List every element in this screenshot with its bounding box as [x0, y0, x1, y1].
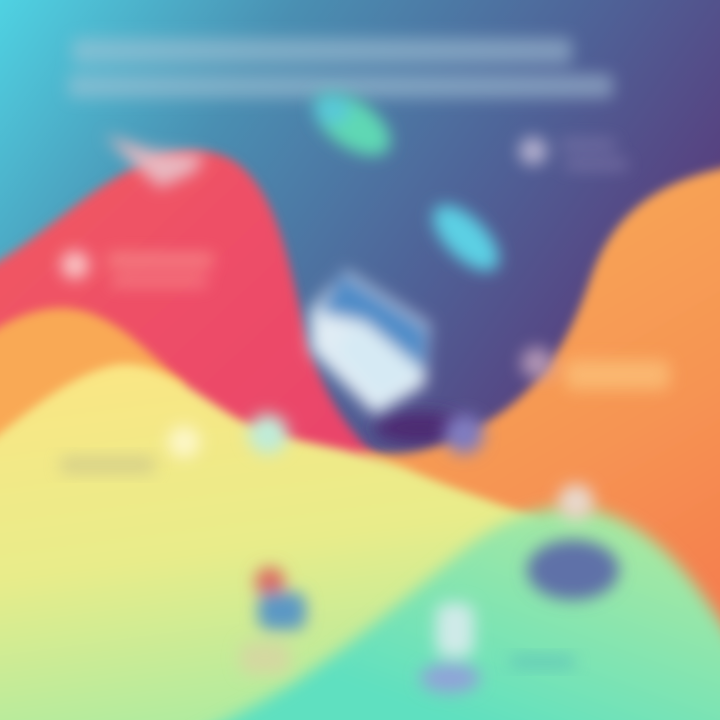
small white icon above oval	[558, 484, 594, 520]
right orange hill	[355, 165, 720, 720]
green hill label placeholder	[510, 655, 575, 669]
icon: top leaf	[303, 80, 401, 168]
red hill label placeholder	[61, 251, 213, 286]
purple valley shade	[374, 412, 466, 444]
title placeholder	[68, 38, 613, 98]
red hill	[0, 151, 380, 520]
central book illustration	[310, 270, 430, 415]
left orange hill	[0, 308, 185, 470]
yellow hill label placeholder	[60, 456, 155, 474]
person figure	[240, 567, 306, 674]
top-right label placeholder	[519, 137, 627, 169]
icon: cyan leaf	[422, 194, 510, 282]
yellow hill	[0, 364, 540, 720]
red hill peak icon	[105, 135, 205, 188]
bottle figure	[420, 603, 480, 693]
small bubble icons	[168, 414, 484, 458]
green hill	[190, 507, 720, 720]
dark oval icon	[527, 540, 619, 600]
right orange label placeholder	[521, 347, 670, 390]
